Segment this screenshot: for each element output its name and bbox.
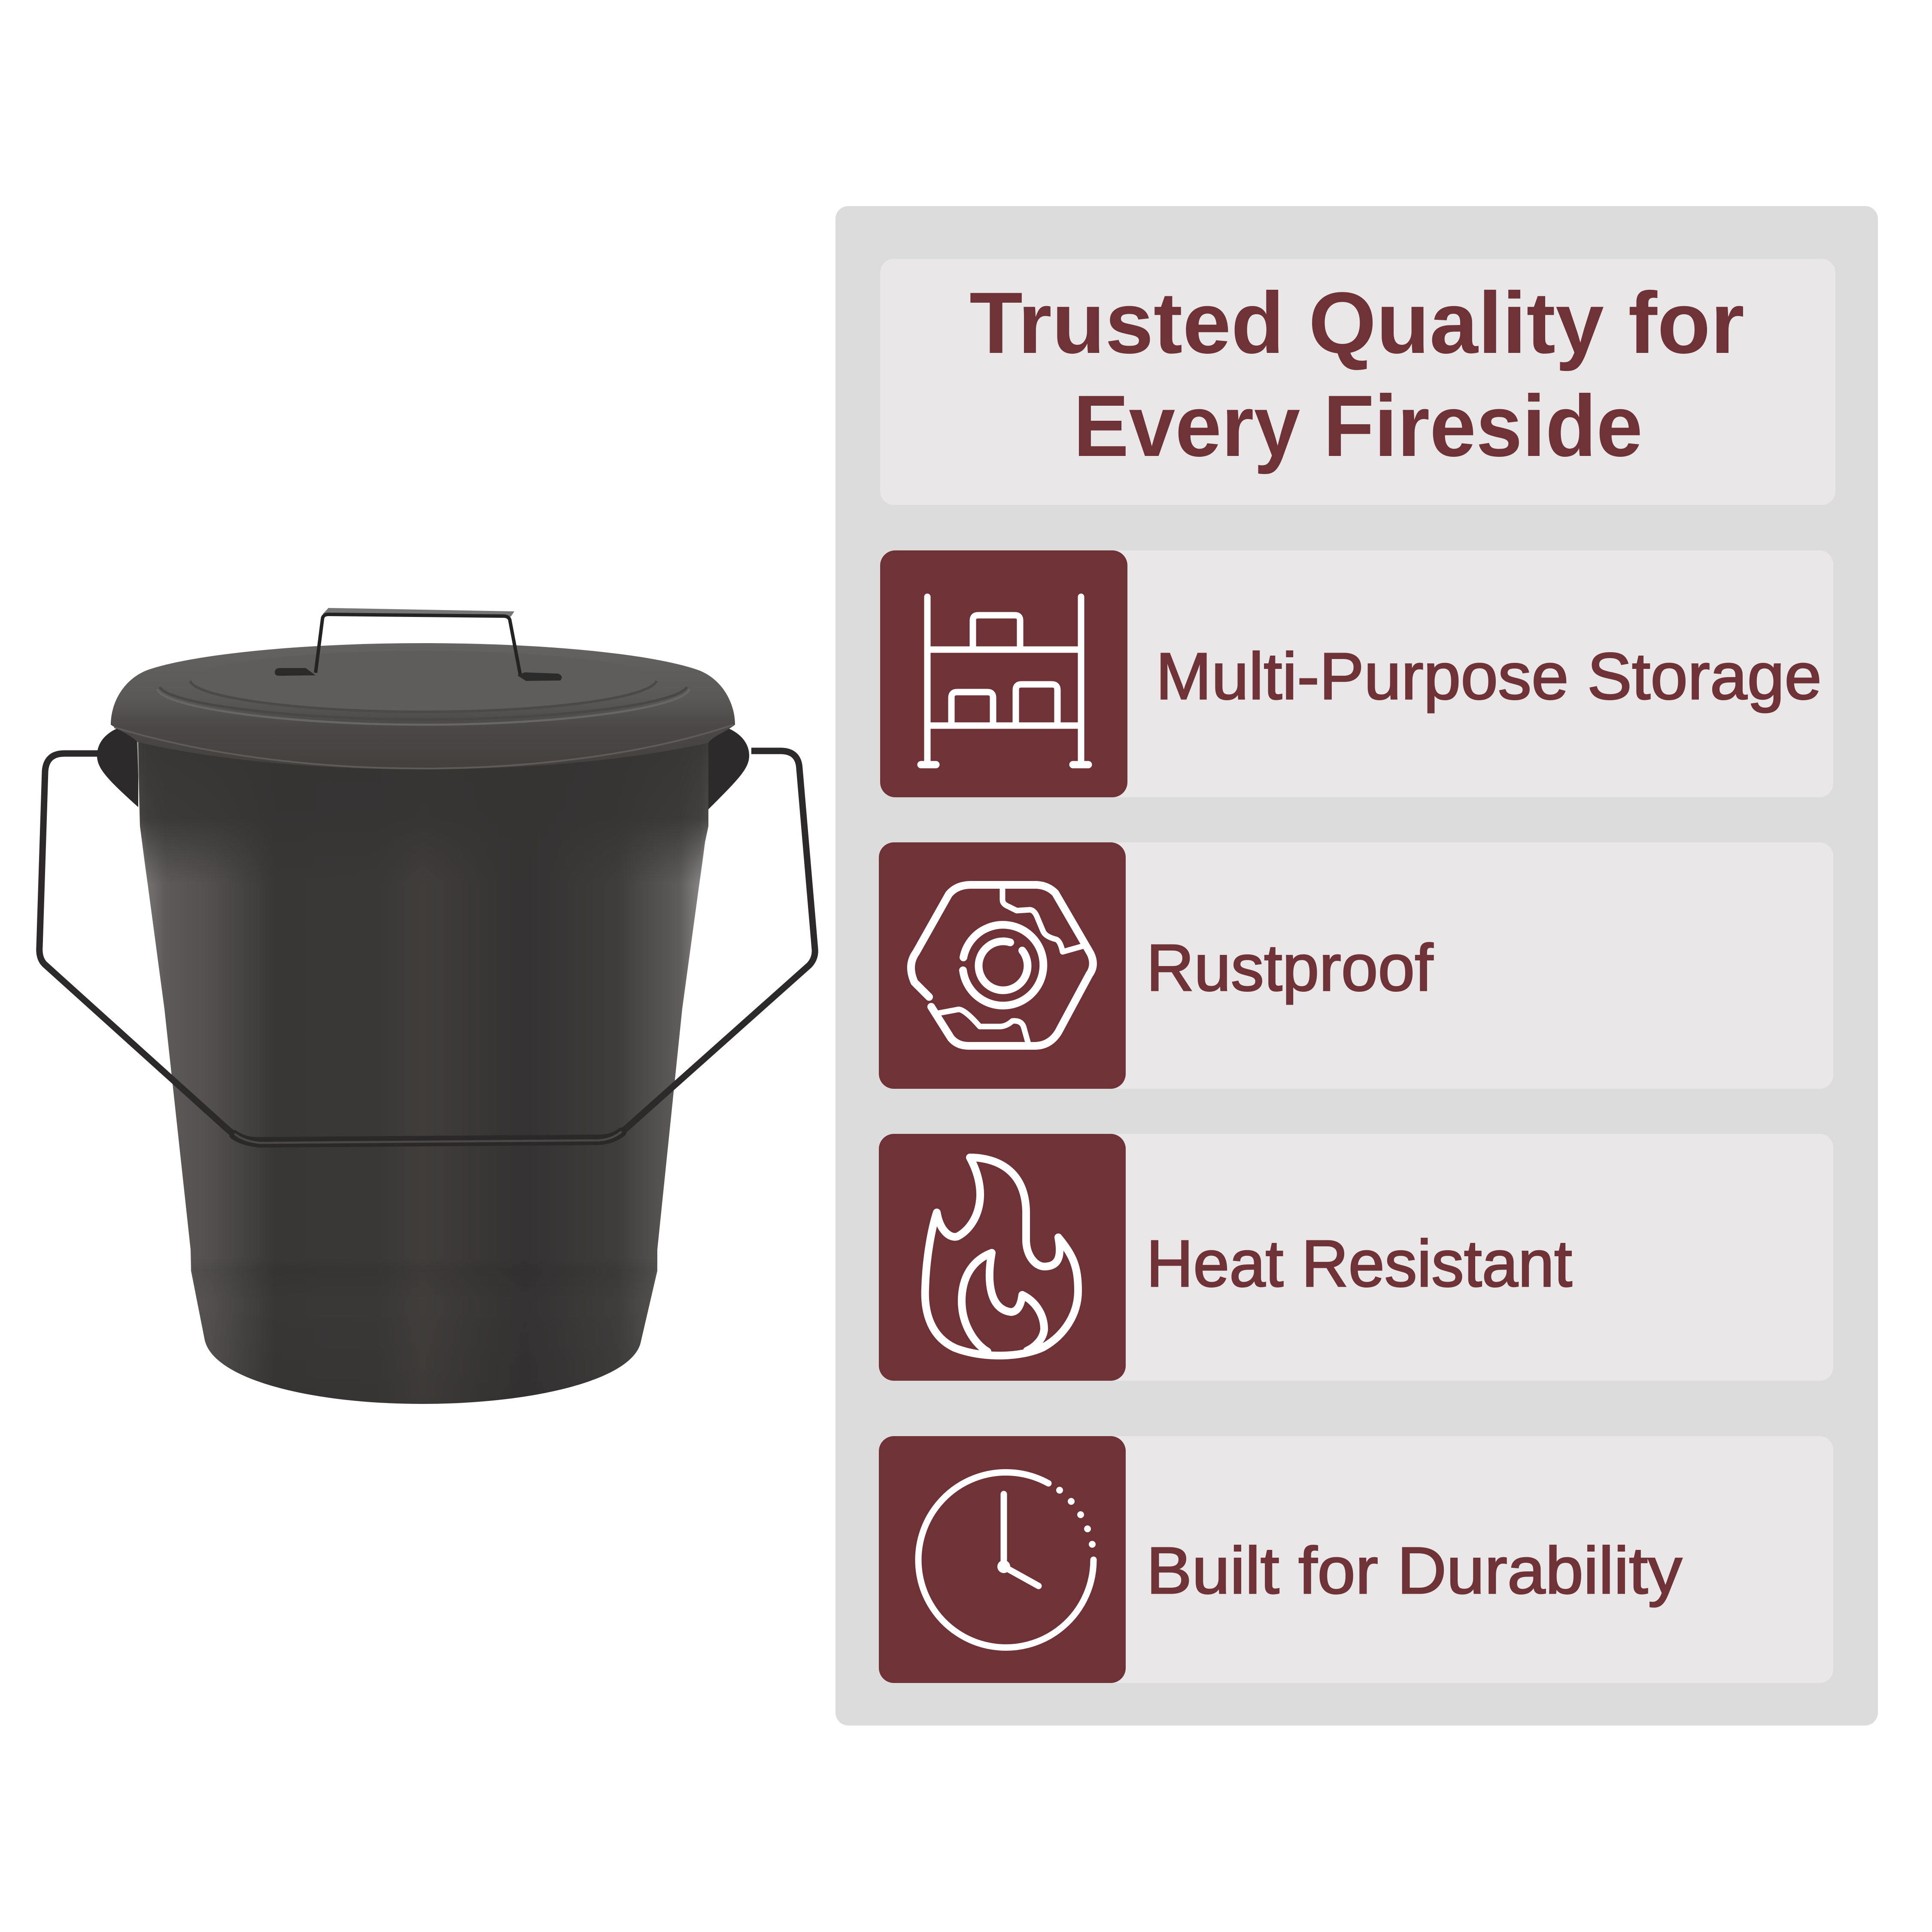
label: rustproof: Rustproof (1146, 931, 1434, 1005)
lid outer ring (157, 687, 690, 725)
right lug (708, 729, 749, 809)
label: heat resistant: Heat Resistant (1146, 1227, 1572, 1300)
bucket bail handle (39, 751, 815, 1140)
lid bottom edge highlight (114, 725, 733, 769)
body lower rib shading (191, 1258, 657, 1404)
lid handle (275, 608, 562, 681)
product photo: black ash bucket with lid (39, 608, 815, 1404)
bucket body (137, 738, 708, 1404)
heading line 1: Trusted Quality for (969, 274, 1744, 372)
panel: feature card (835, 206, 1878, 1725)
icon tile: clock (879, 1436, 1126, 1683)
feature row: built for durability (879, 1436, 1833, 1683)
lid inner plateau (190, 651, 656, 712)
label: multi-purpose storage: Multi-Purpose Storage (1156, 639, 1822, 713)
icon tile: flame (879, 1134, 1126, 1381)
upper body darker section (138, 738, 708, 884)
left lug (97, 729, 138, 807)
feature row: multi-purpose storage (880, 550, 1833, 797)
icon tile: rusted nut (879, 842, 1126, 1089)
lid (111, 643, 735, 769)
feature row: heat resistant (879, 1134, 1833, 1381)
heading line 2: Every Fireside (1073, 377, 1643, 475)
feature row: rustproof (879, 842, 1833, 1089)
icon tile: shelf (880, 550, 1127, 797)
heading block (880, 259, 1835, 505)
bail handle front bar (234, 1132, 622, 1143)
label: built for durability: Built for Durability (1146, 1534, 1682, 1607)
